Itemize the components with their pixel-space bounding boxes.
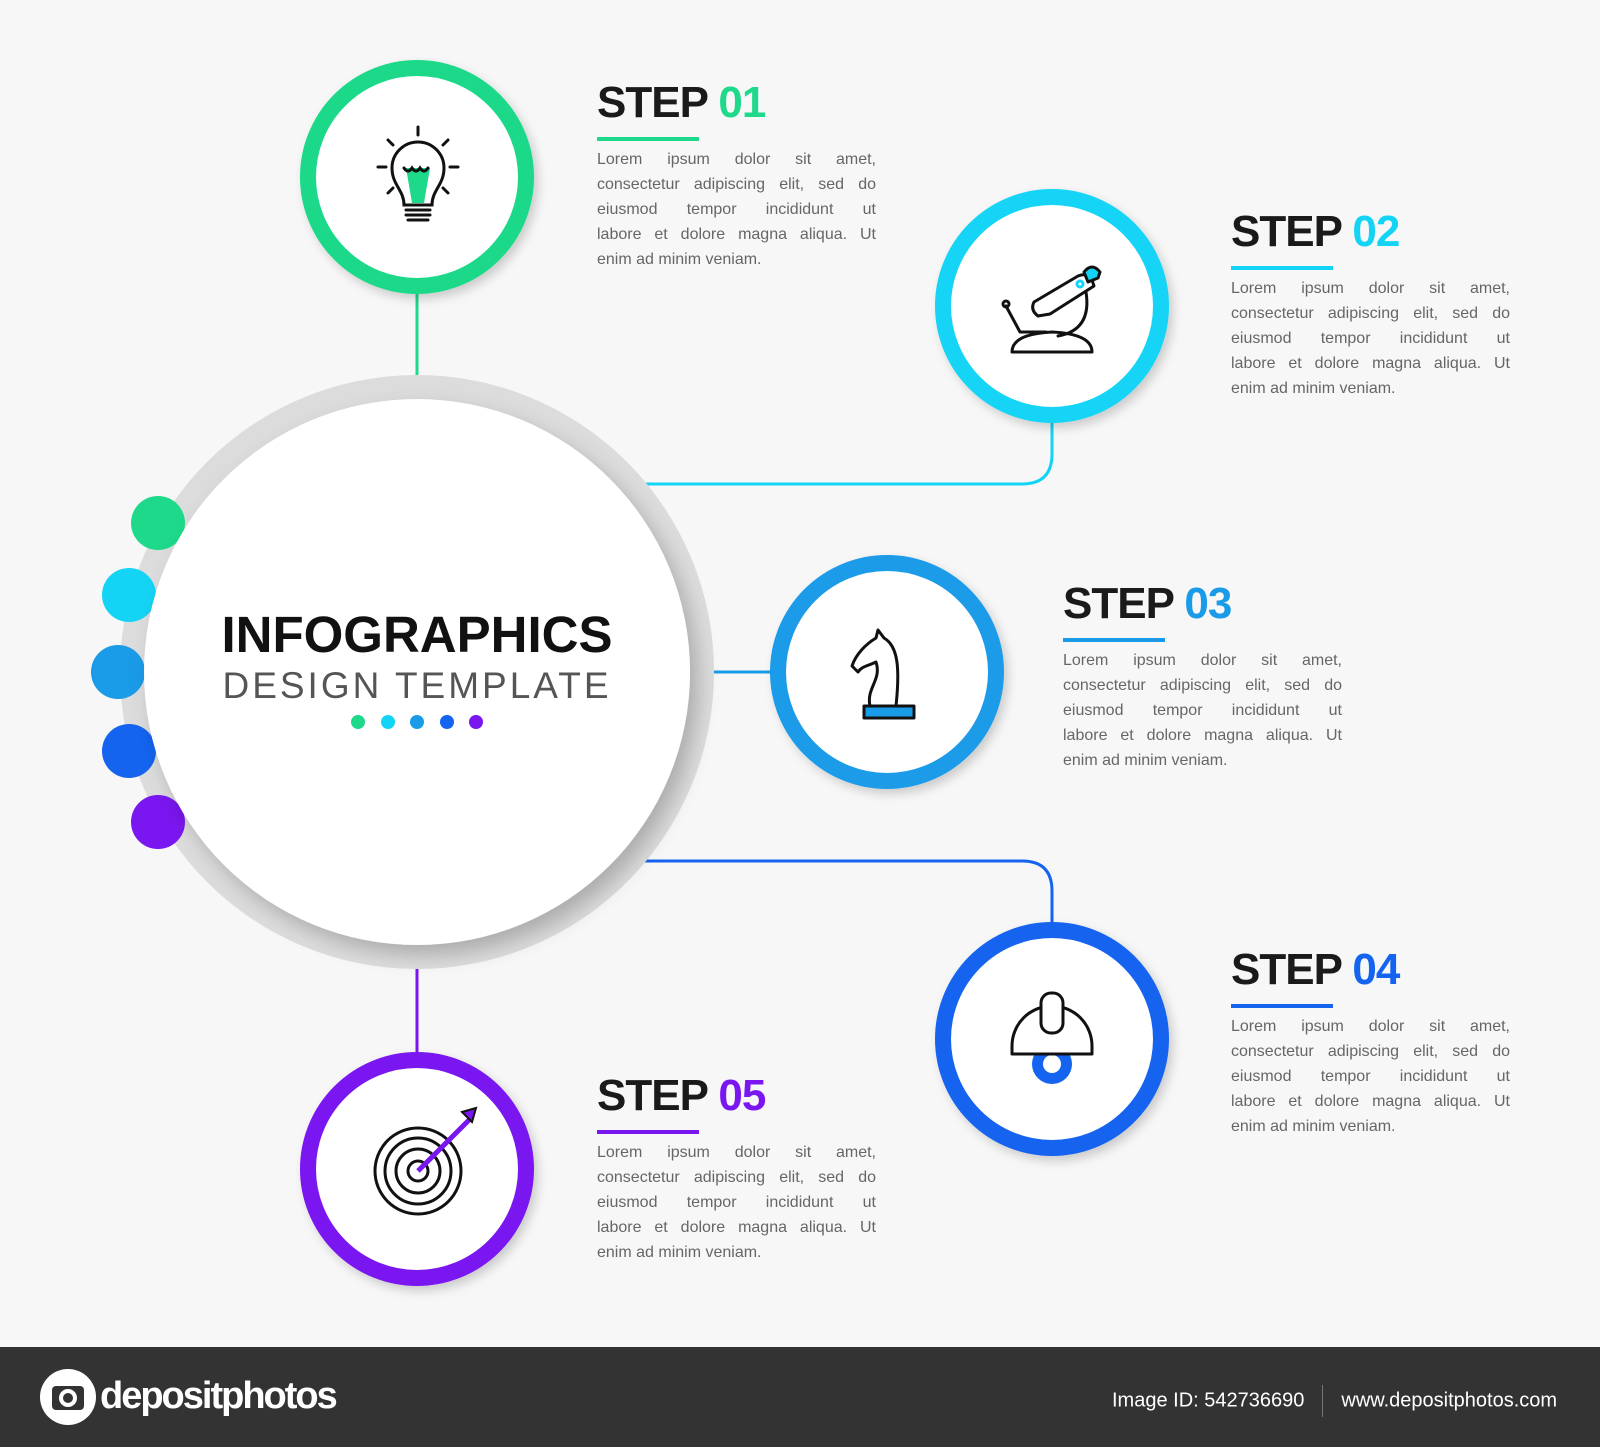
step 02 text: eiusmod tempor incididunt ut bbox=[1231, 330, 1510, 347]
step 05 text: Lorem ipsum dolor sit amet, bbox=[597, 1144, 876, 1161]
step 04 text: consectetur adipiscing elit, sed do bbox=[1231, 1043, 1510, 1060]
step 04 text bbox=[1231, 945, 1510, 1135]
step 01 text: consectetur adipiscing elit, sed do bbox=[597, 176, 876, 193]
step 04 text: eiusmod tempor incididunt ut bbox=[1231, 1068, 1510, 1085]
step 03 text: STEP 03 bbox=[1063, 579, 1231, 628]
step 02 text: consectetur adipiscing elit, sed do bbox=[1231, 305, 1510, 322]
step 04 text: labore et dolore magna aliqua. Ut bbox=[1231, 1093, 1510, 1110]
connectors bbox=[417, 294, 1052, 1054]
step 01 text: labore et dolore magna aliqua. Ut bbox=[597, 226, 876, 243]
step 05 text: STEP 05 bbox=[597, 1071, 765, 1120]
step 04 text: enim ad minim veniam. bbox=[1231, 1118, 1396, 1135]
icon: chess knight bbox=[852, 630, 914, 718]
step 01 text: Lorem ipsum dolor sit amet, bbox=[597, 151, 876, 168]
icon: target with arrow bbox=[375, 1108, 476, 1214]
step 05 text: eiusmod tempor incididunt ut bbox=[597, 1194, 876, 1211]
step 02 text: Lorem ipsum dolor sit amet, bbox=[1231, 280, 1510, 297]
step 01 text: enim ad minim veniam. bbox=[597, 251, 762, 268]
step 02 text: labore et dolore magna aliqua. Ut bbox=[1231, 355, 1510, 372]
central circle bbox=[144, 399, 690, 945]
step circles bbox=[308, 68, 1161, 1278]
footer bbox=[0, 1347, 1600, 1447]
step 03 text: consectetur adipiscing elit, sed do bbox=[1063, 677, 1342, 694]
gray ring bbox=[120, 375, 714, 969]
step 04 text: STEP 04 bbox=[1231, 945, 1399, 994]
central circle: DESIGN TEMPLATE bbox=[222, 665, 612, 706]
icon: microscope bbox=[1003, 267, 1100, 352]
step 03 text: enim ad minim veniam. bbox=[1063, 752, 1228, 769]
step 02 text: enim ad minim veniam. bbox=[1231, 380, 1396, 397]
step 05 text: consectetur adipiscing elit, sed do bbox=[597, 1169, 876, 1186]
icon: light bulb bbox=[378, 127, 458, 220]
step 03 text: labore et dolore magna aliqua. Ut bbox=[1063, 727, 1342, 744]
step 01 text bbox=[597, 78, 876, 268]
step 01 text: STEP 01 bbox=[597, 78, 765, 127]
step 05 text: enim ad minim veniam. bbox=[597, 1244, 762, 1261]
step 02 text: STEP 02 bbox=[1231, 207, 1399, 256]
step 03 text: eiusmod tempor incididunt ut bbox=[1063, 702, 1342, 719]
icon: helmet gear bbox=[1012, 993, 1092, 1084]
step 05 text: labore et dolore magna aliqua. Ut bbox=[597, 1219, 876, 1236]
step 02 text bbox=[1231, 207, 1510, 397]
footer info: Image ID: 542736690 www.depositphotos.com bbox=[1112, 1389, 1557, 1411]
central circle: INFOGRAPHICS bbox=[221, 606, 613, 663]
step 03 text bbox=[1063, 579, 1342, 769]
step 04 text: Lorem ipsum dolor sit amet, bbox=[1231, 1018, 1510, 1035]
footer logo: depositphotos bbox=[100, 1375, 336, 1417]
step 01 text: eiusmod tempor incididunt ut bbox=[597, 201, 876, 218]
side dots bbox=[91, 496, 185, 849]
step 03 text: Lorem ipsum dolor sit amet, bbox=[1063, 652, 1342, 669]
footer logo bbox=[40, 1369, 336, 1425]
step 05 text bbox=[597, 1071, 876, 1261]
